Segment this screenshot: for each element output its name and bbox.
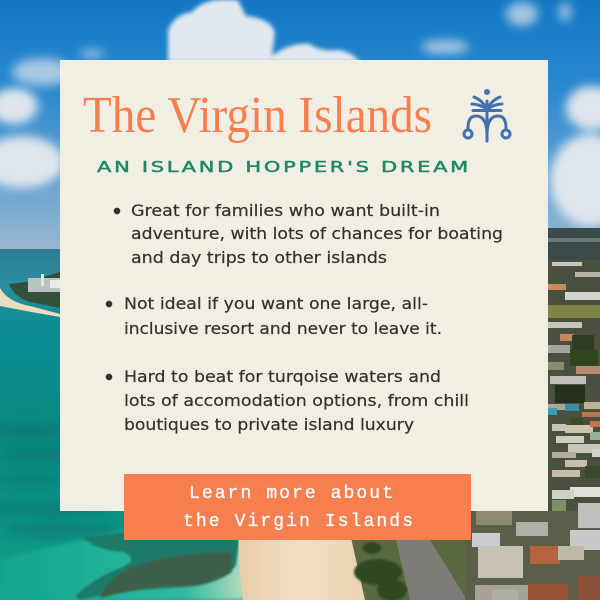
coral reef (75, 532, 240, 600)
left island with resort (0, 272, 60, 317)
bullet 1: and day trips to other islands (131, 248, 387, 267)
sea shadows (0, 424, 115, 536)
bullet 3: boutiques to private island luxury (124, 415, 414, 434)
buildings and trees on right (548, 238, 600, 523)
bullet 1: Great for families who want built-in (131, 201, 440, 220)
bottom trees (354, 542, 407, 600)
bullet 2 (106, 294, 442, 338)
button: learn more: Learn more about (189, 484, 393, 504)
sea (0, 249, 260, 600)
bottom right buildings (465, 503, 600, 600)
bullet 3: Hard to beat for turqoise waters and (124, 367, 441, 386)
clouds (0, 0, 600, 226)
subtitle: AN ISLAND HOPPER'S DREAM (97, 158, 471, 176)
bullet 1: adventure, with lots of chances for boating (131, 224, 503, 243)
bullet 2: inclusive resort and never to leave it. (124, 319, 442, 338)
bullet 1 (114, 201, 503, 267)
sand beach (239, 511, 365, 600)
bullet 2: Not ideal if you want one large, all- (124, 294, 428, 313)
shallow turquoise water (0, 511, 245, 600)
button: learn more (124, 474, 471, 540)
land: town on right (548, 228, 600, 528)
button: learn more: the Virgin Islands (183, 512, 413, 532)
field (548, 305, 600, 318)
bullet 3 (106, 367, 469, 434)
sky (0, 0, 600, 255)
bullet list (106, 201, 503, 434)
coast road (396, 540, 467, 600)
panel: main cream card (60, 60, 548, 511)
title: The Virgin Islands (83, 87, 432, 144)
icon: palm fountain (464, 89, 510, 141)
land base behind beach road (340, 511, 480, 600)
bullet 3: lots of accomodation options, from chill (124, 391, 469, 410)
far hazy town (548, 228, 600, 260)
